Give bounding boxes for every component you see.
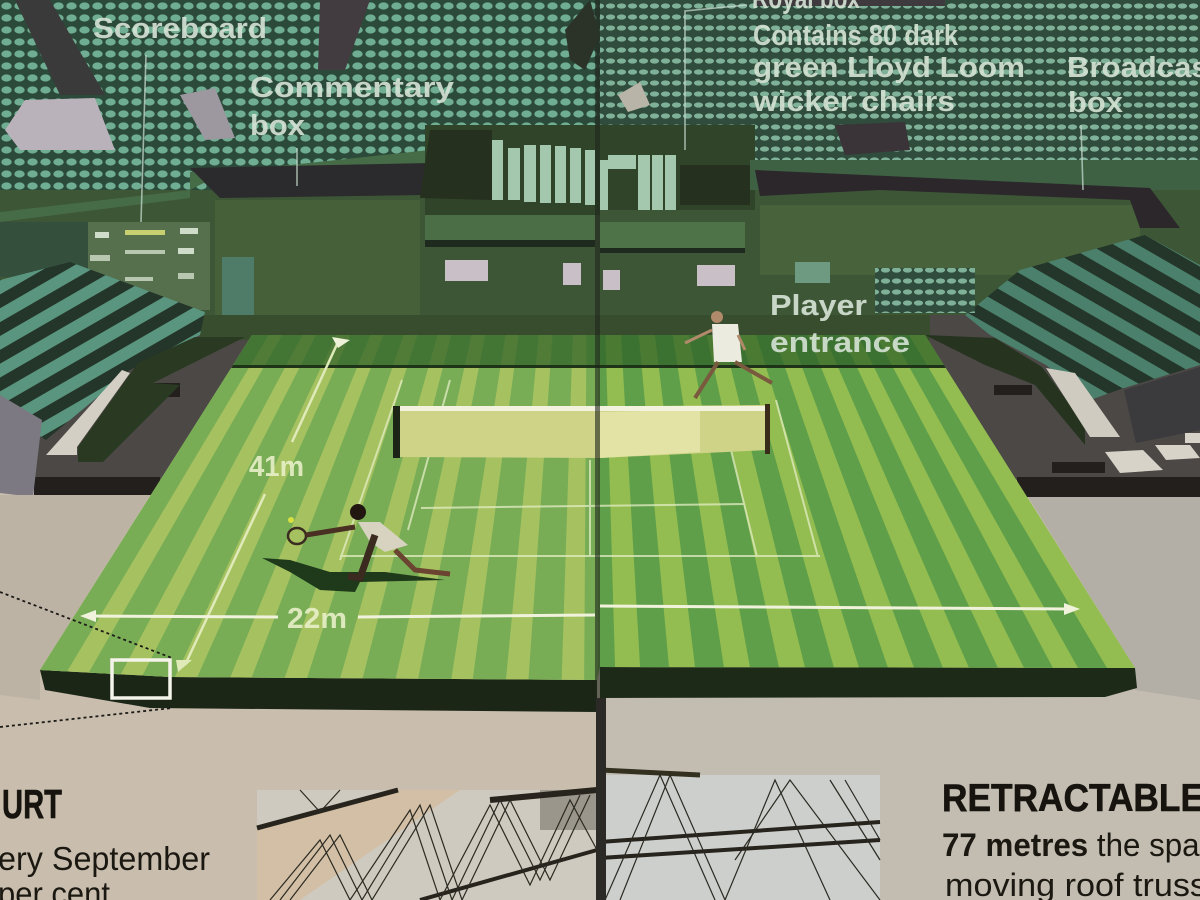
panel: left wall strip [78,337,245,462]
label: 22m: 22m [287,603,347,635]
label: broadcast box: box [1068,87,1123,119]
panel: grass court base right [600,667,1137,698]
label: commentary box [250,72,454,186]
label: royal box [685,0,1025,150]
panel: left and mid stand boxes [5,88,910,155]
decoration: page gutter fold [565,0,650,900]
panel: scoreboard [88,222,210,310]
panel: court lines [340,380,820,560]
image: roof truss right [600,770,880,900]
panel: dark roof overhangs [190,130,1180,228]
label: royal box: wicker chairs [752,86,955,118]
panel: left white strip [46,370,130,455]
arrow: 41m length dimension [176,337,350,672]
panel: right grey structure [1124,367,1200,443]
panel: upper stand seating [0,0,1200,200]
label: player entrance: entrance [770,327,910,359]
text: left article [0,781,210,900]
panel: right seating bank [965,235,1200,400]
panel: small seats above right bank [875,268,975,313]
panel: left grey stand end [0,395,42,497]
text: left article: ery September [0,840,210,877]
label: player entrance: Player [770,290,867,322]
icon: near player [262,504,450,592]
label: royal box: Contains 80 dark [753,20,959,52]
icon: tennis net [393,404,770,458]
label: commentary box: Commentary [250,72,454,104]
label: broadcast box [1067,52,1200,190]
label: 41m: 41m [249,451,304,483]
label: scoreboard [93,13,267,222]
panel: court surround floor [0,315,1200,497]
panel: paper tone right page [600,690,1200,900]
panel: right white steps [1105,433,1200,473]
panel: grass court base [40,670,597,712]
panel: right wall strip [925,335,1085,445]
icon: far player [685,311,772,398]
panel: grass court [40,335,1135,680]
panel: wall openings [222,257,830,315]
label: scoreboard: Scoreboard [93,13,267,45]
panel: paper beside court [0,495,1200,700]
text: retractable roof article [942,777,1200,900]
panel: royal box pale seat columns [492,140,676,210]
arrow: 22m width dimension [80,603,1080,622]
panel: back wall [0,125,1200,340]
panel: right white strip [1046,368,1120,437]
panel: left seating bank [0,262,205,440]
image: roof truss left [257,790,597,900]
text: left article: URT [2,781,62,827]
label: royal box: green Lloyd Loom [753,52,1025,84]
label: player entrance [770,290,910,359]
label: commentary box: box [250,110,305,142]
callout: zoom box and dotted lines [0,592,172,727]
